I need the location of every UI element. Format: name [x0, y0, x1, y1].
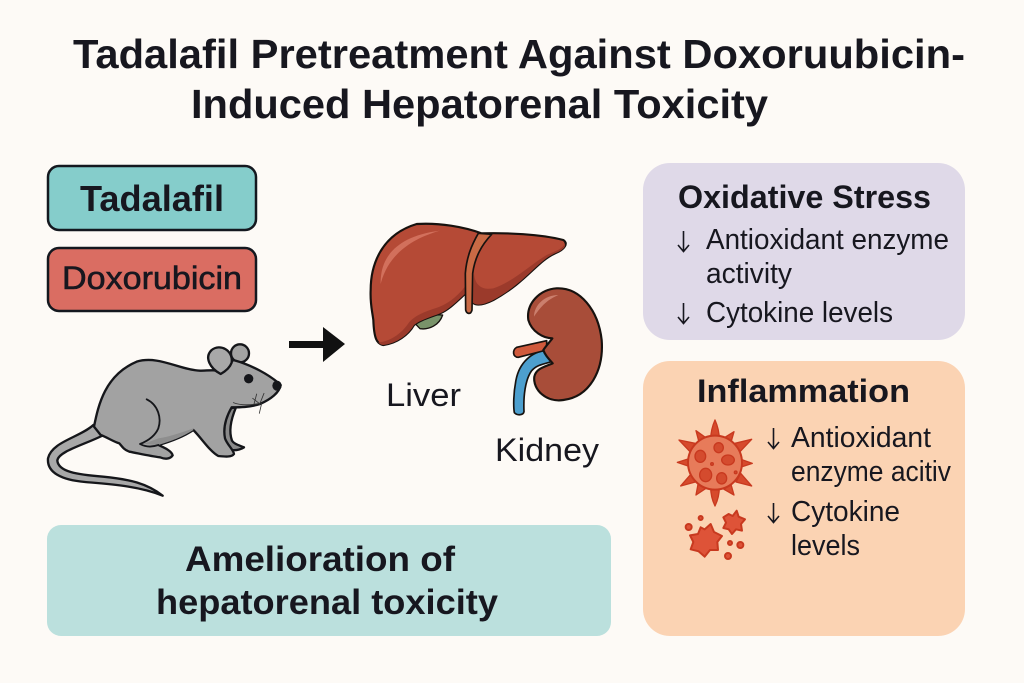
label: Liver: Liver	[386, 377, 461, 413]
text: cytokine levels: levels	[791, 530, 860, 562]
icon: inflammatory cell	[677, 420, 752, 506]
highlight	[381, 231, 440, 284]
text: antioxidant enzyme activity: Antioxidant enzyme	[706, 224, 949, 256]
text: cytokine levels: Cytokine	[791, 496, 900, 528]
lower shading: right lobe	[473, 243, 565, 305]
icon: cell debris	[686, 511, 745, 559]
panel: inflammation	[643, 361, 965, 636]
spikes	[677, 420, 752, 506]
text: antioxidant enzyme: Antioxidant	[791, 422, 931, 454]
text: antioxidant enzyme: enzyme acitiv	[791, 456, 951, 488]
ligament	[465, 233, 492, 313]
gallbladder	[413, 315, 443, 329]
text: antioxidant enzyme activity	[706, 224, 949, 290]
panel: amelioration	[47, 525, 611, 636]
lower shading: left lobe	[378, 287, 465, 345]
label: Kidney: Kidney	[495, 432, 599, 468]
liver lobes	[371, 224, 566, 345]
arrow: cytokine down	[678, 303, 689, 324]
highlight	[534, 295, 558, 317]
arrow: antioxidant down	[678, 231, 689, 252]
icon: kidney	[514, 288, 602, 415]
haunch line	[140, 399, 160, 446]
arrow	[289, 327, 345, 362]
whiskers	[233, 393, 264, 413]
title	[73, 31, 965, 127]
ureter	[514, 350, 552, 415]
kidney body	[528, 288, 602, 400]
text: cytokine levels	[791, 496, 900, 562]
panel: amelioration: Amelioration of	[185, 540, 455, 579]
label: Tadalafil	[48, 166, 256, 230]
label: Doxorubicin	[48, 248, 256, 311]
icon: liver	[371, 224, 566, 345]
text: antioxidant enzyme	[791, 422, 951, 488]
title: Induced Hepatorenal Toxicity	[191, 81, 768, 127]
arrow: cytokine down	[768, 503, 779, 522]
panel: oxidative stress	[643, 163, 965, 340]
heading: inflammation: Inflammation	[697, 373, 910, 409]
belly shadow	[143, 428, 193, 445]
renal vessel	[514, 341, 547, 357]
mouse body	[94, 360, 281, 459]
nose	[272, 381, 282, 391]
icon: mouse	[48, 344, 282, 496]
title: Tadalafil Pretreatment Against Doxoruubicin-	[73, 31, 965, 77]
far ear	[231, 344, 249, 362]
spots	[695, 443, 737, 484]
arrow: antioxidant down	[768, 428, 779, 448]
far front leg	[219, 407, 244, 450]
text: antioxidant enzyme activity: activity	[706, 258, 792, 290]
near ear	[208, 347, 232, 374]
text: cytokine levels: Cytokine levels	[706, 297, 893, 329]
eye	[244, 374, 253, 383]
mouse tail	[48, 425, 163, 496]
label: Tadalafil: Tadalafil	[80, 178, 224, 219]
label: Doxorubicin: Doxorubicin	[62, 260, 242, 296]
heading: oxidative stress: Oxidative Stress	[678, 179, 931, 215]
cell body	[688, 436, 742, 490]
panel: amelioration: hepatorenal toxicity	[156, 583, 499, 622]
